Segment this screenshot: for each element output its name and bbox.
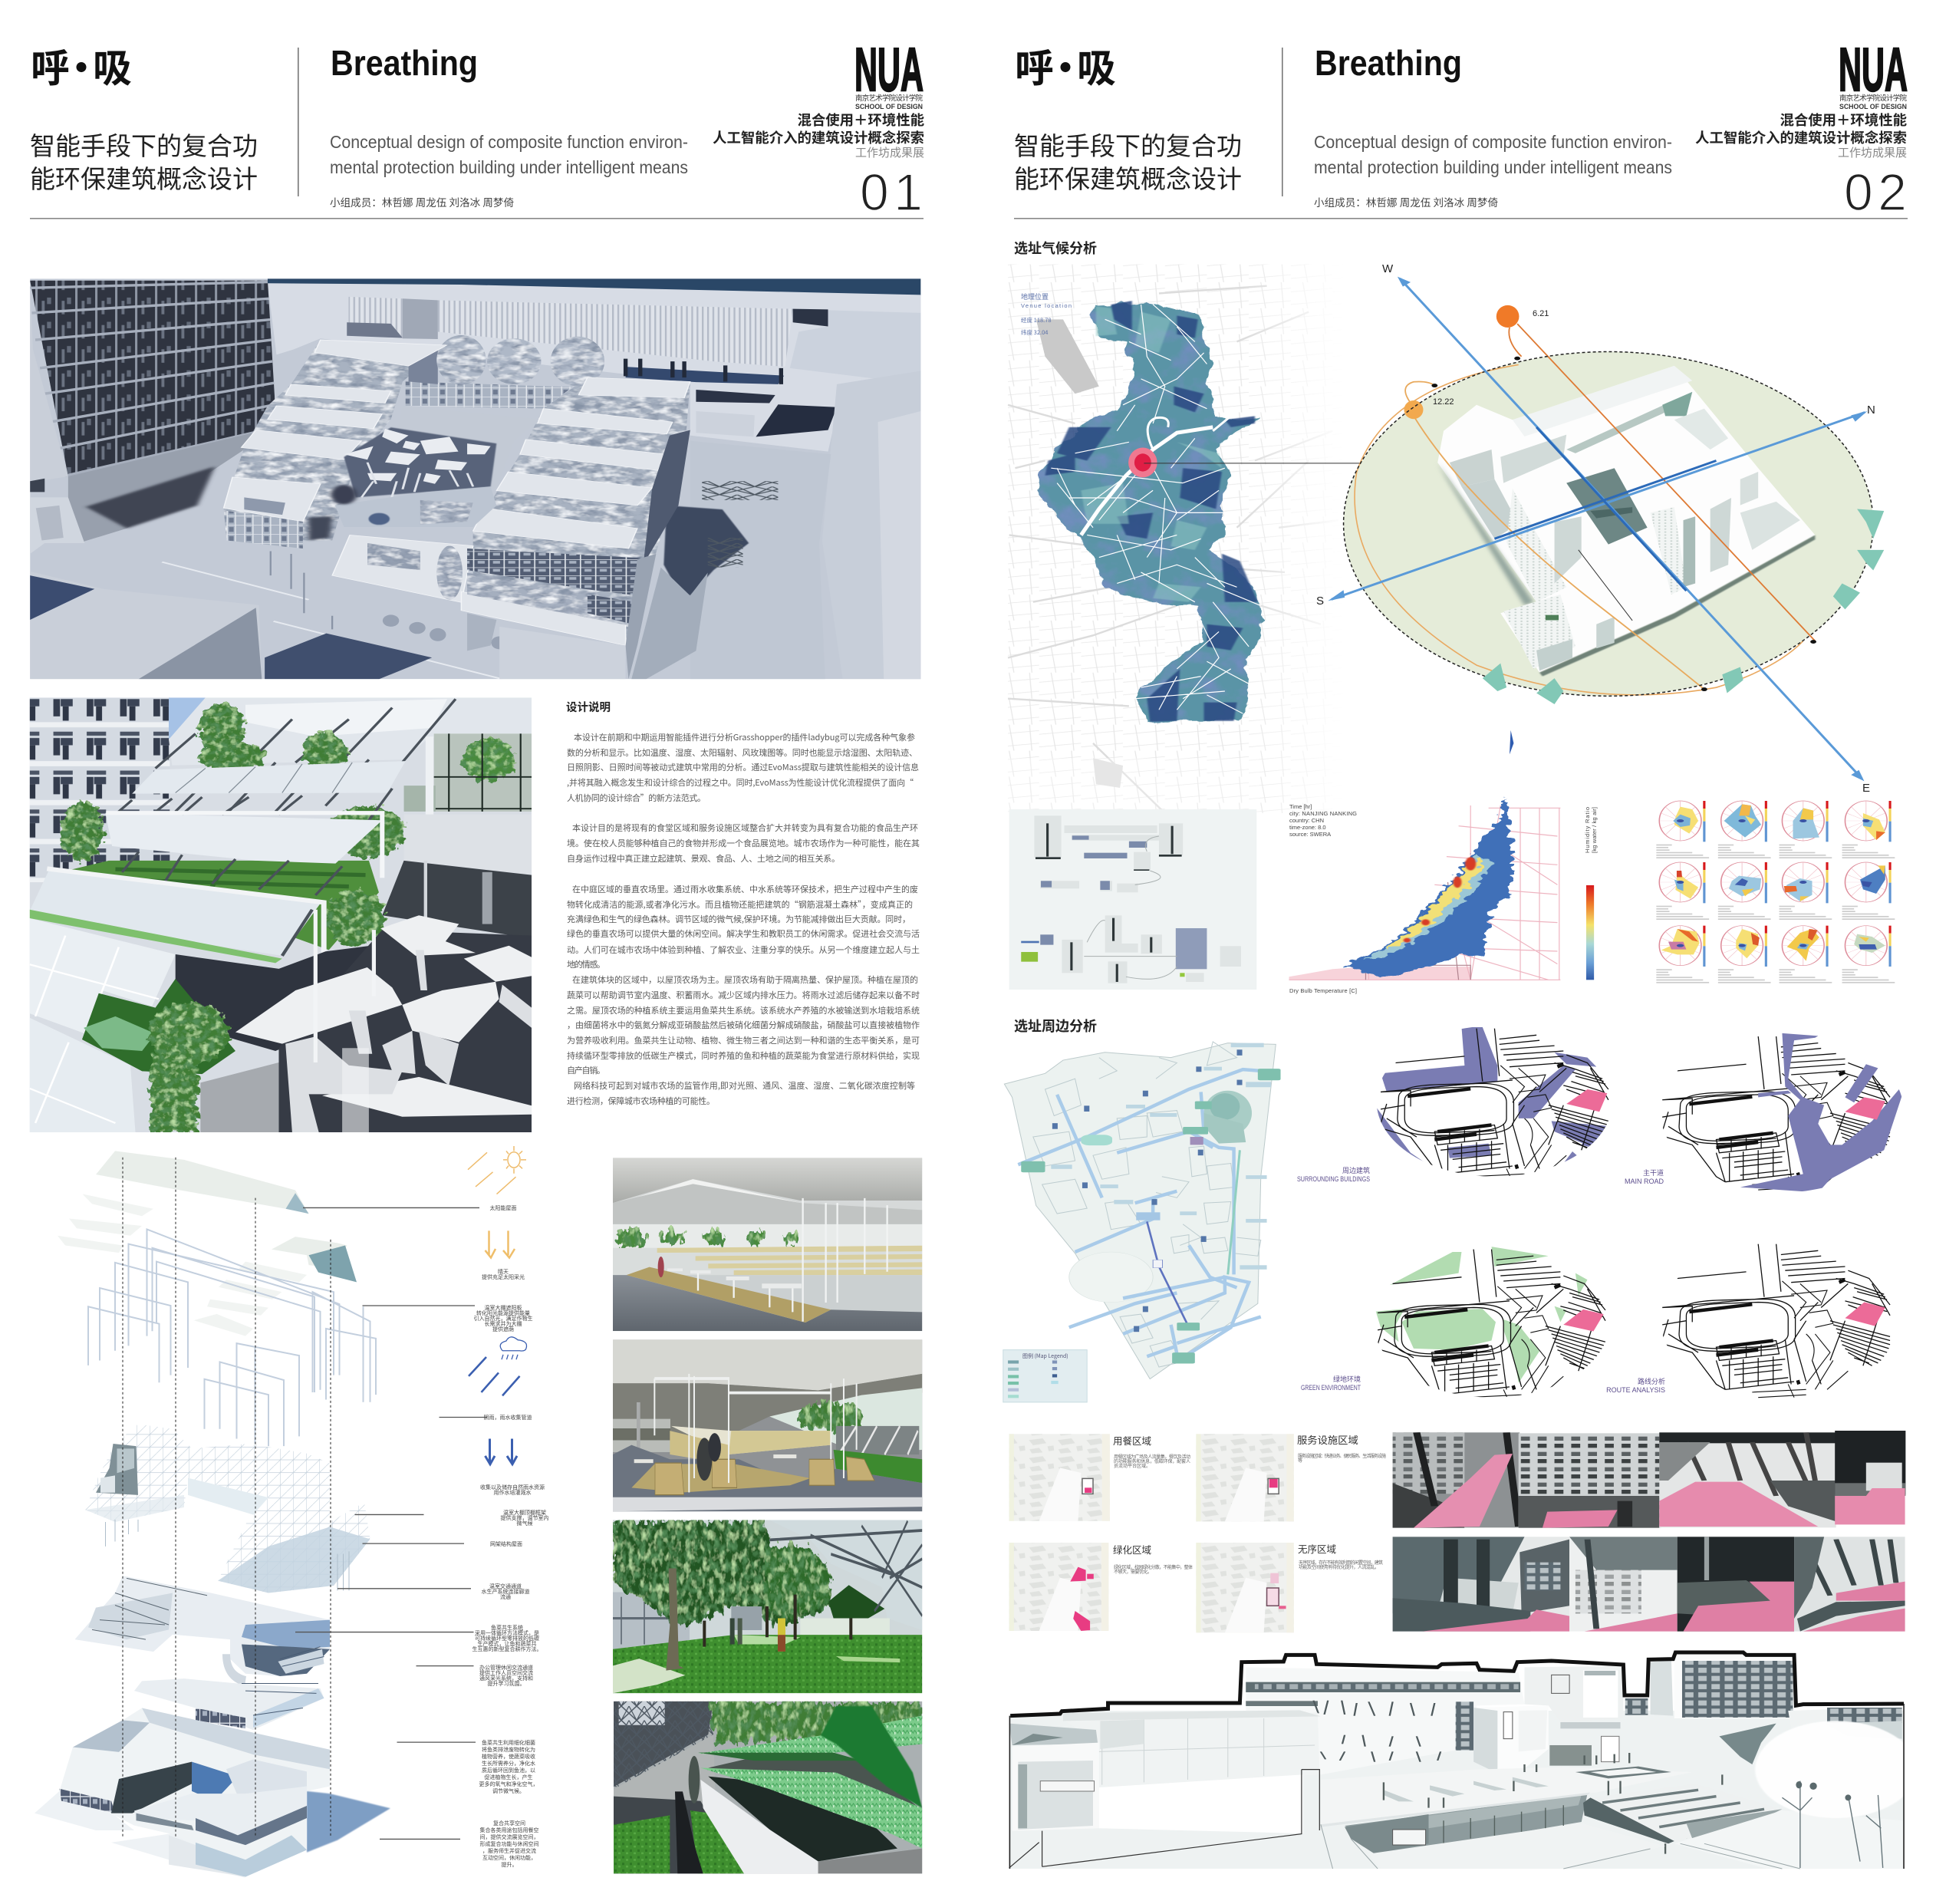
- campus map with legend: [1003, 1042, 1281, 1402]
- green areas: [1204, 1091, 1252, 1135]
- icon: solar arrows: [485, 1230, 515, 1258]
- axonometric annotations: 生互惠的新型复合耕作方法。: [472, 1645, 542, 1653]
- zone labels: 服务设施区域: [1297, 1432, 1358, 1447]
- photo: canteen with wood screen: [613, 1158, 922, 1331]
- connector line: [1144, 463, 1440, 464]
- mini map: service zone: [1196, 1434, 1294, 1521]
- workshop title: 人工智能介入的建筑设计概念探索: [713, 127, 924, 147]
- steps: [1583, 1784, 1782, 1843]
- header rule: [30, 218, 924, 219]
- workshop title: 混合使用＋环境性能: [797, 110, 924, 130]
- axonometric annotations: 集合各类用途包括用餐空: [480, 1827, 538, 1834]
- paragraphs: 动。人们可在城市农场中体验到种植、了解农业、注重分享的快乐。从另一个维度建立起人与土: [567, 944, 920, 956]
- white sky mask: [997, 1642, 1911, 1716]
- axonometric annotations: ，服务师生并促进交流: [482, 1847, 536, 1855]
- axonometric annotations: 晴天: [498, 1268, 509, 1276]
- zone labels: 用餐区域: [1113, 1433, 1151, 1448]
- axonometric annotations: 水生产系统连接廊道: [482, 1588, 529, 1596]
- subtitle: English: mental protection building under intelligent means: [330, 157, 688, 177]
- heading: 设计说明: 设计说明: [566, 699, 611, 715]
- orange orbits: [1355, 364, 1803, 695]
- zone labels: 绿化区域，校园绿化分散，不能集中，整体: [1114, 1563, 1193, 1570]
- map key: 纬度 32.04: [1021, 328, 1048, 337]
- paragraphs: 蔬菜可以帮助调节室内温度、积蓄雨水。减少区域内排水压力。将雨水过滤后储存起来以备不时: [567, 989, 920, 1001]
- chart labels: country: CHN: [1289, 817, 1324, 824]
- axonometric annotations: 温室大棚遮阳板: [485, 1304, 522, 1312]
- map key: Venue location: [1021, 302, 1072, 309]
- axonometric annotations: 采用一体循环方法模式，是: [475, 1629, 539, 1637]
- zone labels: 等: [1298, 1457, 1302, 1464]
- circle map labels: SURROUNDING BUILDINGS: [1297, 1175, 1370, 1183]
- plaza: [1321, 1767, 1692, 1824]
- axonometric annotations: 形成复合功能与休闲空间: [480, 1840, 538, 1848]
- paragraphs: ,并将其融入概念发生和设计综合的过程之中。同时,EvoMass为性能设计优化流程提供了面向“: [567, 776, 914, 789]
- mini map: disordered zone: [1196, 1543, 1294, 1632]
- paragraphs: 物转化成清洁的能源,或者净化污水。而且植物还能把建筑的“钢筋混凝土森林”，变成真正的: [567, 898, 913, 911]
- zone labels: 功能及空间使用有待优化提升，人流混乱。: [1299, 1563, 1379, 1570]
- workshop title: 工作坊成果展: [1838, 144, 1907, 160]
- paragraphs: 自产自销。: [567, 1064, 605, 1076]
- paragraphs: 网络科技可起到对城市农场的监管作用,即对光照、通风、温度、湿度、二氧化碳浓度控制等: [574, 1079, 915, 1092]
- title: 呼吸: 呼·吸: [31, 37, 132, 94]
- photo strip: bottom: [1393, 1537, 1905, 1632]
- paragraphs: 进行检测，保障城市农场种植的可能性。: [567, 1095, 715, 1107]
- zone labels: 员流动平台区域。: [1114, 1462, 1151, 1469]
- heading: site surroundings analysis: 选址周边分析: [1014, 1016, 1097, 1036]
- workshop title: 混合使用＋环境性能: [1780, 110, 1907, 130]
- skyline silhouette: [1010, 1652, 1904, 1716]
- building model: [1437, 366, 1815, 677]
- compass and date labels: 12.22: [1433, 397, 1454, 407]
- compass and date labels: E: [1862, 782, 1870, 795]
- map key: 地理位置: [1021, 292, 1049, 301]
- mini map: green zone: [1009, 1543, 1108, 1631]
- axonometric annotations: 网架结构屋面: [490, 1540, 522, 1548]
- wind rose grid: [1656, 801, 1895, 983]
- zone labels: 的功能服务和休息，低碳环保，配套人: [1114, 1458, 1190, 1464]
- axonometric annotations: 提供工作人员空间交流: [479, 1669, 533, 1677]
- left glass hall: [1009, 1710, 1321, 1868]
- chart labels: [1289, 803, 1598, 994]
- dashed vertical lines: [123, 1158, 331, 1838]
- axonometric annotations: 间，提供交流展览空间，: [480, 1833, 538, 1841]
- chart labels: Dry Bulb Temperature [C]: [1289, 987, 1357, 994]
- photo strip: top: [1393, 1431, 1905, 1528]
- paragraphs: 本设计目的是将现有的食堂区域和服务设施区域整合扩大并转变为具有复合功能的食品生产环: [572, 822, 918, 834]
- psychrometric chart: [1289, 798, 1594, 980]
- page number 01: 01: [860, 163, 923, 222]
- dark tower: [30, 281, 276, 476]
- team members: 小组成员：林哲娜 周龙伍 刘洛冰 周梦倚: [330, 194, 514, 209]
- axonometric annotations: 质后循环回到鱼池，以: [482, 1767, 535, 1774]
- axonometric annotations: 引入自然光，满足作物生: [474, 1315, 532, 1323]
- subtitle: English: mental protection building under intelligent means: [1314, 157, 1672, 177]
- second render: solar panels, trees and pavilions: [30, 697, 532, 1132]
- axonometric annotations: 互动空间，休闲功能，: [482, 1854, 536, 1862]
- logo: NUA: 南京艺术学院设计学院: [855, 92, 923, 103]
- paragraphs: 在建筑体块的区域中，以屋顶农场为主。屋顶农场有助于隔离热量、保护屋顶。种植在屋顶的: [572, 973, 918, 986]
- subtitle: English: [330, 132, 688, 177]
- site ellipse with sun path and compass axes: [1144, 277, 1884, 781]
- rear tower: [1625, 1655, 1902, 1723]
- solar panels: [132, 761, 406, 794]
- section frame: [1009, 1704, 1904, 1869]
- zone labels: 无序区域，存在不能有效利用的闲置空间，建筑: [1299, 1559, 1383, 1566]
- entrance tower: [1473, 1705, 1620, 1774]
- icon: water collection arrows: [485, 1439, 517, 1464]
- circle map: green environment: [1357, 1243, 1626, 1403]
- trees behind: [436, 335, 604, 386]
- paragraphs: 之需。屋顶农场的种植系统主要运用鱼菜共生系统。该系统水产养殖的水被输送到水培栽培系统: [567, 1004, 920, 1016]
- tower facade: [30, 697, 170, 882]
- circle map labels: 主干道: [1643, 1168, 1664, 1178]
- zone labels: 不够大，需要优化。: [1114, 1568, 1152, 1575]
- site marker: [1128, 448, 1157, 477]
- compass and date labels: W: [1382, 262, 1394, 275]
- paragraphs: 日照阴影、日照时间等被动式建筑中常用的分析。通过EvoMass提取与建筑性能相关的设计信息: [567, 761, 919, 773]
- subtitle: Chinese: [1014, 126, 1242, 196]
- workshop title: 人工智能介入的建筑设计概念探索: [1695, 127, 1907, 147]
- rear glass with tree: [434, 733, 532, 812]
- sun 12.22 path: [1404, 381, 1704, 690]
- axonometric annotations: 通风采光系统，支持和: [479, 1675, 533, 1682]
- city map of Nanjing: [1008, 265, 1345, 813]
- axonometric annotations: 温室大棚顶棚框架: [503, 1509, 546, 1517]
- compass and date labels: N: [1867, 404, 1875, 417]
- axonometric annotations: 办公管理休闲交流通道: [479, 1664, 533, 1672]
- axonometric annotations: 提供遮荫: [492, 1326, 514, 1333]
- lattice roof: [85, 1424, 370, 1593]
- rear garden: [325, 805, 406, 858]
- subtitle: Chinese: 智能手段下的复合功: [1014, 126, 1242, 163]
- axonometric annotations: 微气候: [517, 1520, 532, 1527]
- main volume: [60, 1708, 330, 1877]
- header: page 01: [30, 35, 924, 222]
- subtitle: Chinese: 智能手段下的复合功: [30, 126, 258, 163]
- paragraphs: 境。使在校人员能够种植自己的食物并形成一个食品展览地。城市农场作为一种可能性，能在其: [567, 837, 920, 849]
- workshop title: [1695, 110, 1907, 160]
- workshop title: [713, 110, 924, 160]
- paragraphs: 人机协同的设计综合”的新方法范式。: [567, 792, 706, 804]
- paragraphs: 持续循环型零排放的低碳生产模式，同时养殖的鱼和种植的蔬菜能为食堂进行原材料供给，实现: [567, 1049, 920, 1062]
- axonometric annotations: 太阳能屋面: [489, 1204, 517, 1212]
- axonometric annotations: 促进植物生长，产生: [485, 1774, 532, 1781]
- photo: trees on green lawn: [613, 1520, 922, 1693]
- ground plates: [35, 1791, 245, 1878]
- road network base: [1008, 265, 1345, 813]
- steel frames: [88, 1229, 376, 1446]
- wing shadows: [663, 506, 749, 595]
- dashed site boundary: [1344, 351, 1873, 696]
- axonometric annotations: 鱼菜共生利用细化细菌: [482, 1739, 535, 1747]
- header: page 02: [1014, 35, 1908, 222]
- truss rows: [156, 699, 456, 812]
- wing masses: [224, 340, 443, 541]
- photo: hydroponic planter gallery: [614, 1701, 922, 1873]
- icon: cloud and rain: [469, 1337, 527, 1395]
- zone labels: 绿化区域: [1113, 1542, 1151, 1556]
- chart labels: Humidity Ratio: [1584, 807, 1591, 853]
- psych spike: [1510, 730, 1513, 754]
- circle map: route analysis: [1656, 1237, 1908, 1404]
- chart labels: city: NANJING NANKING: [1289, 810, 1357, 817]
- compass and date labels: S: [1316, 595, 1324, 608]
- paragraphs: ，由细菌将水中的氨氮分解成亚硝酸盐然后被硝化细菌分解成硝酸盐，硝酸盐可以直接被植物作: [567, 1019, 920, 1031]
- logo: NUA: 南京艺术学院设计学院: [1839, 92, 1907, 103]
- climate analysis row: [1009, 798, 1594, 990]
- axonometric annotations: 调节微气候。: [492, 1787, 525, 1795]
- header divider: [298, 48, 299, 196]
- compass and date labels: [1316, 262, 1875, 795]
- bottom perspective section: [997, 1642, 1917, 1869]
- hero render: aerial view of greenhouse building: [30, 277, 920, 679]
- axonometric annotations: 更多的氧气和净化空气，: [479, 1780, 538, 1788]
- axonometric annotations: [472, 1204, 549, 1869]
- leader lines: [295, 1207, 487, 1839]
- paragraphs: 绿色的垂直农场可以提供大量的休闲空间。解决学生和教职员工的休闲需求。促进社会交流与活: [567, 927, 920, 940]
- photo: canteen with wooden planters: [613, 1339, 922, 1511]
- paragraphs: 自身运作过程中真正建立起建筑、景观、食品、人、土地之间的相互关系。: [567, 852, 840, 865]
- roof top: [96, 1151, 308, 1214]
- header divider: [1282, 48, 1283, 196]
- axonometric annotations: 生产模式，让鱼和蔬菜共: [477, 1640, 537, 1648]
- axonometric annotations: 植物营养，使蔬菜吸收: [482, 1753, 535, 1761]
- paragraphs: [567, 731, 920, 1107]
- zone labels: 服务设施区域：快递业务、便民服务、生活服务设施: [1298, 1452, 1386, 1459]
- subtitle: Chinese: 能环保建筑概念设计: [30, 159, 258, 196]
- team members: 小组成员：林哲娜 周龙伍 刘洛冰 周梦倚: [1314, 194, 1498, 209]
- axonometric annotations: 温室交通通道: [489, 1583, 522, 1590]
- exploded axonometric diagram: [35, 1146, 527, 1878]
- map key: 经度 118.78: [1021, 316, 1052, 324]
- right trees and shadow: [1719, 1709, 1917, 1868]
- axonometric annotations: 复合共享空间: [493, 1820, 525, 1827]
- axonometric annotations: 收集以及储存自然雨水资源: [480, 1484, 545, 1491]
- paragraphs: 充满绿色和生气的绿色森林。调节区域的微气候,保护环境。为节能减排做出巨大贡献。同时，: [567, 913, 910, 925]
- axonometric annotations: 流通: [500, 1593, 511, 1601]
- axonometric annotations: 可持续循环型零排放的低碳: [475, 1635, 539, 1642]
- blue location tags: [1051, 1043, 1271, 1270]
- axonometric annotations: 长需求并为大棚: [485, 1320, 522, 1328]
- circle map labels: [1297, 1165, 1665, 1394]
- logo: NUA: SCHOOL OF DESIGN: [1839, 103, 1907, 110]
- interior photos column: [613, 1158, 922, 1873]
- axonometric annotations: 用作水培灌溉水: [494, 1489, 531, 1497]
- road linework: [1051, 305, 1261, 713]
- axonometric annotations: 转化阳光能源提供能量: [476, 1309, 530, 1317]
- teal location tags: [1021, 1069, 1281, 1364]
- chart labels: source: SWERA: [1289, 831, 1331, 838]
- vertical tree screen: [1313, 1701, 1440, 1762]
- ground details: [162, 562, 502, 679]
- logo: NUA: SCHOOL OF DESIGN: [855, 103, 923, 110]
- mini map: dining zone: [1009, 1434, 1110, 1521]
- boundary nodes: [1431, 357, 1816, 691]
- icon: sun: [468, 1146, 526, 1194]
- circle map labels: GREEN ENVIRONMENT: [1301, 1384, 1361, 1392]
- circle maps: [1357, 1023, 1908, 1404]
- title: Breathing: Breathing: [331, 43, 478, 83]
- zone labels: [1113, 1432, 1386, 1575]
- ground: [1368, 1823, 1665, 1869]
- circle map labels: ROUTE ANALYSIS: [1606, 1386, 1665, 1394]
- legend box: [1003, 1350, 1087, 1402]
- title: 呼吸: 呼·吸: [1015, 37, 1116, 94]
- legend title: 图例 (Map Legend): [1022, 1352, 1068, 1360]
- zone labels: 用餐区域为广场及人流量集，餐饮及活动: [1114, 1453, 1190, 1460]
- page number 02: 02: [1844, 163, 1907, 222]
- chart labels: time-zone: 8.0: [1289, 824, 1326, 831]
- axonometric annotations: 提升。: [502, 1861, 517, 1869]
- paragraphs: 为营养吸收利用。鱼菜共生让动物、植物、微生物三者之间达到一种和谐的生态平衡关系，是可: [567, 1034, 920, 1046]
- white pavilions: [278, 930, 532, 1132]
- subtitle: Chinese: 能环保建筑概念设计: [1014, 159, 1242, 196]
- grasshopper script panel: [1009, 809, 1256, 990]
- central sculpture: [344, 427, 496, 497]
- axonometric annotations: 生长所需养分，净化水: [482, 1760, 535, 1767]
- paragraphs: 地的情感。: [567, 958, 605, 970]
- subtitle: English: Conceptual design of composite function environ-: [330, 132, 688, 152]
- circle map: surrounding buildings: [1357, 1023, 1626, 1182]
- paragraphs: 数的分析和显示。比如温度、湿度、太阳辐射、风玫瑰图等。同时也能显示焓湿图、太阳轨迹、: [567, 746, 917, 759]
- slab layer 2: [134, 1678, 324, 1730]
- logo: NUA: [1839, 35, 1908, 110]
- chart labels: Time [hr]: [1289, 803, 1312, 810]
- heading: site climate analysis: 选址气候分析: [1014, 238, 1097, 258]
- axonometric annotations: 将鱼类排泄废物转化为: [482, 1746, 535, 1754]
- bottom left block and shadows: [30, 572, 139, 680]
- axonometric annotations: 提供充足太阳采光: [482, 1273, 525, 1281]
- compass axes: [1328, 277, 1867, 781]
- circle map labels: 路线分析: [1638, 1376, 1665, 1386]
- text block: design description: [566, 699, 920, 1107]
- site disc: [1344, 351, 1873, 696]
- parking markers: [1052, 1049, 1243, 1332]
- slab layer 1: [75, 1576, 330, 1676]
- subtitle: English: [1314, 132, 1672, 177]
- axonometric annotations: 鱼菜共生系统: [491, 1624, 523, 1632]
- zone maps: [1009, 1431, 1905, 1632]
- compass and date labels: 6.21: [1533, 309, 1549, 318]
- paragraphs: 本设计在前期和中期运用智能插件进行分析Grasshopper的插件ladybug可以完成各种气象参: [574, 731, 915, 743]
- chart labels: [kg water / kg air]: [1591, 807, 1598, 853]
- logo: NUA: [854, 35, 924, 110]
- header rule: [1014, 218, 1908, 219]
- subtitle: Chinese: [30, 126, 258, 196]
- planter: [30, 910, 282, 963]
- sun 6.21 path: [1496, 305, 1815, 641]
- solar slabs: [224, 340, 690, 645]
- title: Breathing: Breathing: [1315, 43, 1462, 83]
- logo: NUA: NUA: [854, 35, 924, 104]
- zone labels: 无序区域: [1298, 1541, 1336, 1556]
- axonometric annotations: 提升学习氛围。: [488, 1680, 525, 1688]
- subtitle: English: Conceptual design of composite function environ-: [1314, 132, 1672, 152]
- axonometric annotations: 提供支撑，调节室内: [500, 1514, 549, 1522]
- circle map labels: MAIN ROAD: [1625, 1178, 1664, 1185]
- circle map labels: 周边建筑: [1342, 1165, 1370, 1175]
- brick podium: [1321, 1793, 1590, 1854]
- map key: [1021, 292, 1072, 337]
- wind markers: [1483, 509, 1884, 704]
- circle map: main road: [1656, 1029, 1908, 1195]
- circle map labels: 绿地环境: [1333, 1374, 1361, 1384]
- teaching block: [1246, 1666, 1623, 1774]
- people and small trees: [1384, 1753, 1747, 1854]
- axonometric annotations: 阴雨，雨水收集管道: [483, 1414, 532, 1421]
- campus paths: [1018, 1069, 1279, 1356]
- workshop title: 工作坊成果展: [855, 144, 924, 160]
- paragraphs: 在中庭区域的垂直农场里。通过雨水收集系统、中水系统等环保技术，把生产过程中产生的废: [572, 883, 918, 895]
- river: [1081, 427, 1213, 535]
- administrative region: [1039, 303, 1264, 723]
